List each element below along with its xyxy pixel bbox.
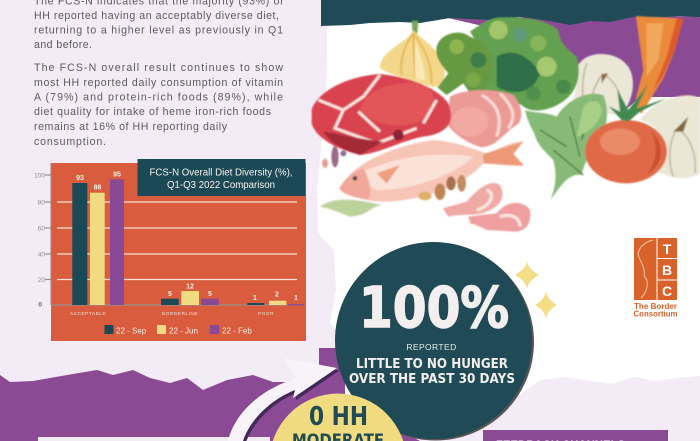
intro text block: The FCS-N overall result continues to show [34, 62, 283, 74]
dark torn header band [321, 0, 700, 26]
bar chart: FCS-N overall diet diversity: 40 [38, 252, 45, 258]
callout: 100% little to no hunger: 100% [359, 276, 509, 341]
chart title box [138, 159, 306, 196]
logo: The Border Consortium: T [663, 241, 672, 257]
logo: The Border Consortium [634, 238, 678, 318]
icon: pink meat cut [447, 90, 521, 147]
bar chart: FCS-N overall diet diversity: 22 - Jun [169, 326, 198, 336]
logo: The Border Consortium: The Border [634, 302, 677, 311]
icon: white pumpkin left [567, 54, 633, 115]
bar chart: FCS-N overall diet diversity: 12 [186, 284, 194, 290]
icon: spinach leaves [525, 94, 607, 200]
callout: 0 HH moderate [270, 394, 406, 441]
intro text block: remains at 16% of HH reporting daily [34, 121, 228, 133]
bar chart: FCS-N overall diet diversity: ACCEPTABLE [70, 311, 106, 317]
icon: onion [380, 21, 445, 87]
torn lavender panel bottom right [520, 376, 700, 441]
intro text block: most HH reported daily consumption of vitamin [34, 77, 283, 89]
callout: 100% little to no hunger: REPORTED [406, 342, 457, 352]
icon: broccoli [436, 33, 494, 95]
icon: tomato [585, 83, 667, 183]
callout: 100% little to no hunger: LITTLE TO NO HUNGER [356, 357, 508, 372]
icon: white pumpkin right [640, 95, 700, 178]
arrow: curved white arrow [228, 358, 340, 441]
bar chart: FCS-N overall diet diversity: 0 [38, 302, 42, 308]
logo: The Border Consortium: C [662, 283, 672, 299]
callout: 100% little to no hunger: OVER THE PAST 30 DAYS [349, 372, 515, 387]
bar chart: FCS-N overall diet diversity: BORDERLINE [162, 311, 198, 317]
bar chart: FCS-N overall diet diversity: 20 [38, 277, 45, 284]
bar chart: FCS-N overall diet diversity [34, 159, 306, 341]
intro text block: consumption. [34, 136, 106, 148]
torn purple band bottom left [0, 348, 420, 441]
purple heading box bottom right [483, 430, 668, 441]
callout: 0 HH moderate: 0 HH [309, 402, 368, 432]
bar chart: FCS-N overall diet diversity: 5 [208, 291, 212, 298]
bar chart: FCS-N overall diet diversity: 22 - Sep [116, 326, 147, 336]
icon: sparkle stars [512, 261, 557, 343]
intro text block: returning to a higher level as previously in Q1 [34, 24, 283, 36]
intro text block: A (79%) and protein-rich foods (89%), while [34, 92, 283, 104]
icon: chicken drumsticks [443, 183, 530, 232]
bar chart: FCS-N overall diet diversity: 1 [253, 295, 257, 302]
icon: big lettuce [470, 17, 579, 110]
chart title box: FCS-N Overall Diet Diversity (%), [150, 168, 292, 178]
chart title box: Q1-Q3 2022 Comparison [167, 180, 275, 191]
purple backdrop behind vegetables [448, 16, 700, 115]
bar chart: FCS-N overall diet diversity: 80 [38, 200, 45, 206]
icon: fish [339, 140, 524, 202]
callout: 100% little to no hunger [335, 242, 534, 440]
bar chart: FCS-N overall diet diversity: 5 [168, 291, 172, 298]
intro text block [34, 0, 283, 148]
bar chart: FCS-N overall diet diversity: POOR [258, 311, 274, 317]
bar chart: FCS-N overall diet diversity: 95 [113, 172, 121, 178]
logo: The Border Consortium: B [662, 262, 672, 278]
intro text block: and before. [34, 39, 92, 51]
bar chart: FCS-N overall diet diversity: 60 [38, 226, 45, 232]
icon: nuts and seeds [320, 175, 466, 217]
intro text block: HH reported having an acceptably diverse diet, [34, 10, 279, 22]
icon: red beef cut [312, 74, 451, 155]
torn white paper panel [317, 14, 700, 395]
bar chart: FCS-N overall diet diversity: 93 [76, 175, 84, 182]
white box bottom left [38, 437, 270, 441]
bar chart: FCS-N overall diet diversity: 2 [275, 292, 279, 298]
bar chart: FCS-N overall diet diversity: 86 [94, 184, 101, 192]
logo: The Border Consortium: Consortium [634, 310, 678, 318]
intro text block: diet quality for intake of heme iron-rich foods [34, 106, 271, 118]
icon: carrot [633, 16, 683, 113]
bar chart: FCS-N overall diet diversity: 22 - Feb [222, 326, 252, 336]
bar chart: FCS-N overall diet diversity: 100 [34, 172, 45, 180]
bar chart: FCS-N overall diet diversity: 1 [294, 295, 298, 302]
icon: small ingredients [322, 146, 346, 168]
illustration: watercolor food [312, 16, 700, 232]
